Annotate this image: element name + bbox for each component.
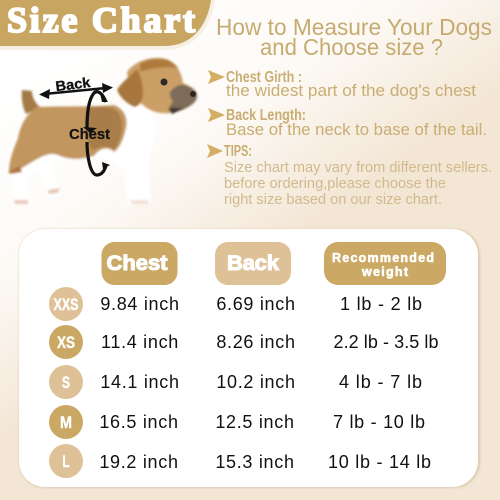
heading: how to measure: How to Measure Your Dogs: [216, 14, 492, 40]
row: XS: XS: [57, 334, 75, 352]
instruction: back length: Back Length:: [226, 107, 306, 124]
row: M: 12.5 inch: [215, 412, 295, 432]
row: L: [49, 444, 431, 478]
instruction: chest girth: Chest Girth :: [226, 69, 302, 86]
row: L: 15.3 inch: [215, 452, 295, 472]
header: chest: Chest: [106, 252, 168, 275]
row: M: [49, 405, 425, 439]
muzzle: [169, 85, 197, 113]
row: M: M: [60, 414, 72, 432]
row: XS: [49, 325, 438, 359]
header: recommended weight: weight: [361, 265, 409, 279]
instruction: tips: [207, 143, 492, 208]
heading: how to measure: and Choose size ?: [260, 34, 443, 60]
back arrow: [39, 74, 113, 99]
ear: [117, 69, 143, 107]
row: S: 10.2 inch: [216, 372, 296, 392]
chest arrow: [69, 92, 110, 175]
puppy photo: [8, 58, 197, 204]
header: recommended weight: [324, 242, 446, 285]
header: recommended weight: Recommended: [332, 251, 434, 265]
row: XXS: 6.69 inch: [216, 294, 296, 314]
heading: how to measure: [216, 14, 492, 60]
header: back: Back: [227, 252, 279, 275]
row: M: 7 lb - 10 lb: [333, 412, 425, 432]
illustration: puppy with measurement arrows: [8, 58, 197, 204]
body fur: [9, 105, 127, 172]
row: XS: 11.4 inch: [101, 332, 179, 352]
row: S: [49, 365, 422, 399]
row: XXS: [49, 287, 422, 321]
instruction: chest girth: the widest part of the dog's chest: [226, 81, 476, 100]
panel: size table: [19, 229, 480, 488]
instruction: tips: right size based on our size chart.: [224, 192, 442, 208]
instruction: back length: Base of the neck to base of the tail.: [226, 120, 487, 139]
chest arrow: Chest: [69, 127, 110, 143]
white legs and belly: [10, 103, 157, 204]
row: S: 4 lb - 7 lb: [339, 372, 422, 392]
row: S: 14.1 inch: [100, 372, 180, 392]
header: back: [215, 242, 291, 285]
row: L: 10 lb - 14 lb: [328, 452, 431, 472]
row: XXS: 1 lb - 2 lb: [340, 294, 422, 314]
title banner: [0, 0, 215, 50]
header: chest: [102, 242, 178, 285]
instruction: chest girth: [208, 69, 476, 100]
head: [127, 58, 197, 113]
row: S: S: [62, 374, 70, 392]
tail: [22, 90, 40, 114]
row: M: 16.5 inch: [99, 412, 179, 432]
instruction: tips: TIPS:: [224, 143, 252, 160]
title banner: Size Chart: [7, 0, 195, 40]
instruction: tips: Size chart may vary from different sellers.: [224, 160, 492, 176]
instruction: back length: [208, 107, 487, 139]
row: L: L: [62, 453, 70, 471]
row: XXS: XXS: [54, 296, 78, 314]
row: XXS: 9.84 inch: [100, 294, 180, 314]
toes: [14, 200, 28, 204]
row: XS: 2.2 lb - 3.5 lb: [334, 332, 438, 352]
row: L: 19.2 inch: [99, 452, 179, 472]
instruction: tips: before ordering,please choose the: [224, 176, 446, 192]
back arrow: Back: [55, 74, 91, 94]
row: XS: 8.26 inch: [216, 332, 296, 352]
chin: [168, 108, 185, 114]
